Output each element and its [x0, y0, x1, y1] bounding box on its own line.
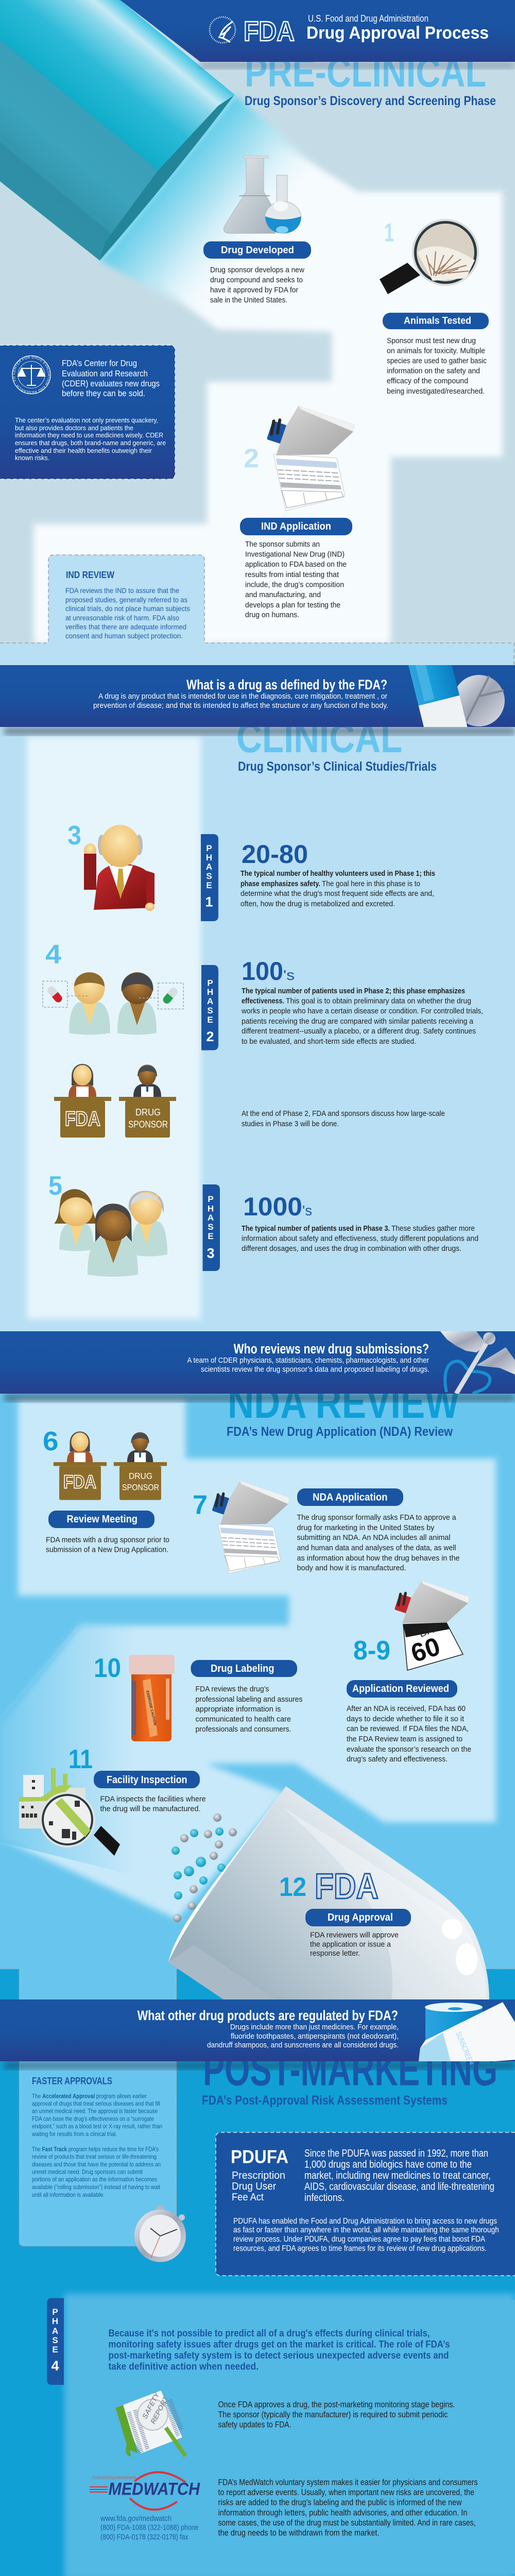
text: phase 1 description: often, how the drug is metabolized and excreted.	[241, 900, 395, 908]
text: drug labeling description: appropriate information is	[196, 1705, 281, 1714]
tab: phase 1: H	[206, 853, 212, 862]
stat: 1000's: 1000	[243, 1192, 302, 1221]
answer text: dandruff shampoos, and sunscreens are all considered drugs.	[207, 2041, 399, 2049]
text: drug developed description: sale in the United States.	[210, 296, 287, 304]
pill: Drug Developed	[203, 241, 311, 259]
step number 4: 4	[45, 940, 61, 970]
PDUFA body text	[233, 2217, 499, 2253]
text: NDA application description: The drug sponsor formally asks FDA to approve a	[297, 1513, 456, 1522]
text: NDA application description: and human data and analyses of the data, as well	[297, 1544, 456, 1552]
tab: phase 4: H	[52, 2316, 58, 2326]
text: drug approval description	[310, 1931, 399, 1958]
text: IND application description: drug on humans.	[245, 611, 299, 619]
title: Drug Approval Process	[306, 23, 489, 43]
tab: phase 1: A	[206, 862, 212, 872]
text: phase 4 intro: monitoring safety issues after drugs get on the market is critical. The role of FDA’s	[108, 2339, 450, 2350]
card body: unmet medical need. Drug sponsors can submit	[32, 2168, 143, 2176]
text: drug approval description: the application or issue a	[310, 1940, 391, 1948]
text: safety updates: The sponsor (typically the manufacturer) is required to submit periodic	[218, 2410, 448, 2419]
panel: faster approvals card	[19, 2056, 177, 2246]
text: MedWatch contact: (800) FDA-0178 (322-0178) fax	[100, 2533, 188, 2541]
icon: review meeting podiums: DRUG	[129, 1471, 152, 1481]
text: animals tested description	[387, 337, 487, 396]
tab: phase 4: 4	[51, 2358, 59, 2374]
icon: FDA and sponsor podiums: FDA	[65, 1108, 100, 1130]
text: safety updates: safety updates to FDA.	[218, 2420, 291, 2430]
panel: clinical section background	[0, 727, 515, 1332]
text: drug approval description: FDA reviewers will approve	[310, 1931, 399, 1939]
question title: Who reviews new drug submissions?	[234, 1341, 429, 1357]
text: phase 3 description: The typical number of patients used in Phase 3.	[242, 1224, 390, 1233]
text: phase 1 description: The typical number of healthy volunteers used in Phase 1; this	[241, 869, 435, 878]
card body: proposed studies, generally referred to as	[65, 596, 187, 604]
tab: phase 1: E	[206, 880, 212, 890]
pill: Application Reviewed: Application Reviewed	[352, 1683, 449, 1694]
tab: phase 2: A	[207, 996, 213, 1006]
band: other products	[0, 1999, 515, 2576]
pill: Animals Tested	[383, 313, 489, 329]
text: facility inspection description: the drug will be manufactured.	[100, 1805, 201, 1814]
text: drug developed description: have it approved by FDA for	[210, 286, 298, 294]
text: NDA application description	[297, 1513, 459, 1572]
text: MedWatch contact: (800) FDA-1088 (322-1088) phone	[100, 2523, 199, 2532]
pill: IND Application: IND Application	[261, 521, 331, 532]
heading: CLINICAL: CLINICAL	[236, 715, 402, 761]
pill: Drug Labeling: Drug Labeling	[211, 1663, 274, 1674]
step number 6: 6	[43, 1427, 59, 1456]
text: application reviewed description: the FDA Review team is assigned to	[347, 1735, 462, 1743]
card body: The Accelerated Approval program allows earlier	[32, 2092, 147, 2099]
tab: phase 3: P	[208, 1194, 214, 1204]
icon: review meeting podiums: SPONSOR	[122, 1483, 159, 1492]
icon: stopwatch	[134, 2206, 186, 2262]
icon: day 60 calendar: DAY	[418, 1622, 441, 1640]
stat: 20-80: 20-80	[242, 840, 308, 869]
icon: day 60 calendar: 60	[407, 1632, 443, 1668]
subheading: post-approval: FDA’s Post-Approval Risk Assessment Systems	[202, 2093, 448, 2108]
text: MedWatch contact: www.fda.gov/medwatch	[100, 2514, 171, 2523]
text: phase 1 description: determine what the drug's most frequent side effects are and,	[241, 889, 434, 898]
step number 7: 7	[193, 1490, 208, 1520]
text: MedWatch description: FDA’s MedWatch voluntary system makes it easier for physicians and consumers	[218, 2478, 478, 2487]
text: MedWatch description: some cases, the use of the drug must be substantially limited. And in rare cases,	[218, 2518, 476, 2528]
text: facility inspection description	[100, 1795, 206, 1814]
text: drug labeling description: FDA reviews the drug’s	[196, 1685, 269, 1693]
callout heading: (CDER) evaluates new drugs	[62, 379, 160, 388]
panel: CDER callout	[0, 345, 176, 480]
icon: drops falling from funnel	[171, 1814, 237, 1922]
decorative folded tube	[0, 0, 235, 261]
callout body: effective and their health benefits outweigh their	[15, 447, 152, 454]
question title: What other drug products are regulated by FDA?	[138, 2008, 398, 2023]
pill: Drug Approval	[305, 1909, 411, 1926]
step number 10: 10	[94, 1653, 121, 1683]
stat: 100's: 100	[242, 957, 283, 986]
band: what is a drug	[0, 665, 515, 736]
text: phase 4 intro	[108, 2328, 450, 2372]
panel: post-marketing section background	[0, 2061, 515, 2576]
text: phase 2 description	[241, 987, 483, 1046]
label: sunscreen: SUNSCREEN	[454, 2030, 475, 2066]
text: MedWatch description: the drug needs to be withdrawn from the market.	[218, 2529, 379, 2538]
pill: Review Meeting	[48, 1511, 154, 1528]
logo: MedWatch: Food and Drug Administration	[93, 2475, 136, 2480]
icon: prescription bottle	[129, 1655, 175, 1741]
text: MedWatch contact	[100, 2514, 199, 2541]
step number 1: 1	[384, 218, 394, 247]
callout body: ensures that drugs, both brand-name and generic, are	[15, 439, 166, 447]
card body: diseases and those that have the potential to address an	[32, 2161, 161, 2168]
card body: approval of drugs that treat serious diseases and that fill	[32, 2100, 160, 2107]
text: IND application description: and manufacturing, and	[245, 591, 321, 599]
text: NDA application description: as information about how the drug behaves in the	[297, 1554, 459, 1563]
pill: Animals Tested: Animals Tested	[404, 316, 471, 327]
tab: phase 3: A	[208, 1213, 214, 1223]
card body: waiting for results from a clinical trial.	[31, 2130, 117, 2138]
text: phase 1 description: phase emphasizes safety.	[241, 879, 320, 888]
text: IND application description: develops a plan for testing the	[245, 601, 340, 609]
heading: NDA REVIEW: NDA REVIEW	[228, 1378, 460, 1428]
text: application reviewed description: evaluate the sponsor’s research on the	[347, 1745, 471, 1754]
text: application reviewed description: can be reviewed. If FDA files the NDA,	[347, 1724, 469, 1733]
callout body: but also provides doctors and patients the	[15, 425, 133, 432]
card body: an unmet medical need. The approval is faster because	[32, 2108, 158, 2115]
card body: review of products that treat serious or life-threatening	[32, 2153, 157, 2160]
tab: phase 3: E	[208, 1231, 214, 1241]
text: drug developed description: Drug sponsor develops a new	[210, 266, 304, 275]
icon: white funnel	[168, 1786, 489, 1999]
text: phase 3 description: information about safety and effectiveness, study different populations and	[242, 1234, 478, 1243]
text: application reviewed description	[347, 1704, 471, 1764]
PDUFA history text: 1,000 drugs and biologics have come to the	[304, 2159, 472, 2170]
text: NDA application description: submitting an NDA. An NDA includes all animal	[297, 1533, 450, 1542]
icon: FDA and sponsor podiums: SPONSOR	[128, 1119, 168, 1129]
text: phase 4 intro: Because it's not possible to predict all of a drug's effects during clinical trials,	[108, 2328, 430, 2339]
text: phase 4 intro: post-marketing safety system is to detect serious unexpected adverse events and	[108, 2350, 449, 2361]
text: phase 1 description: The goal here in this phase is to	[322, 879, 420, 888]
answer text: Drugs include more than just medicines. For example,	[230, 2023, 399, 2031]
section background: post-marketing top blocks	[0, 1969, 515, 2000]
tab: phase 2	[201, 965, 218, 1050]
step number 12: 12	[279, 1872, 306, 1902]
text: review meeting description	[46, 1535, 169, 1554]
tab: phase 1: S	[206, 871, 212, 881]
icon: magnifier over fur	[380, 219, 479, 294]
answer text	[93, 692, 388, 710]
text: application reviewed description: After an NDA is received, FDA has 60	[347, 1704, 466, 1713]
pill: Review Meeting: Review Meeting	[67, 1514, 138, 1525]
icon: safety report	[115, 2391, 185, 2456]
text: safety updates: Once FDA approves a drug, the post-marketing monitoring stage begins.	[218, 2400, 455, 2409]
pill: Facility Inspection	[94, 1771, 200, 1788]
callout heading	[62, 359, 160, 398]
text: IND application description: include, the drug’s composition	[245, 581, 344, 589]
subheading: NDA review: FDA’s New Drug Application (NDA) Review	[227, 1425, 453, 1439]
answer text: fluoride toothpastes, antiperspirants (not deodorant),	[231, 2032, 399, 2041]
PDUFA history text	[304, 2148, 494, 2204]
step numbers 8-9: 8-9	[353, 1636, 390, 1666]
card body: clinical trials, do not place human subjects	[65, 604, 190, 613]
text: drug developed description: drug compound and seeks to	[210, 276, 303, 284]
callout body: known risks.	[15, 454, 49, 462]
icon: flasks	[224, 156, 301, 233]
text: end of phase 2: studies in Phase 3 will be done.	[242, 1120, 339, 1128]
icon: caduceus	[440, 1331, 515, 1394]
text: animals tested description: information on the safety and	[387, 367, 480, 376]
logo: MedWatch	[90, 2472, 200, 2510]
text: IND application description: Investigational New Drug (IND)	[245, 550, 345, 558]
text: phase 4 intro: take definitive action when needed.	[108, 2362, 259, 2372]
callout heading: before they can be sold.	[62, 388, 145, 398]
text: IND application description: application to FDA based on the	[245, 561, 347, 569]
card body: available (“rolling submission”) instead of having to wait	[32, 2183, 161, 2191]
card title: FASTER APPROVALS	[32, 2076, 112, 2087]
text: facility inspection description: FDA inspects the facilities where	[100, 1795, 206, 1803]
icon: sunscreen bottle and tube	[419, 2002, 515, 2061]
card body: FDA reviews the IND to assure that the	[65, 586, 179, 595]
card body: endpoint,” such as a blood test or X-ray result, rather than	[32, 2123, 162, 2130]
callout body: information they need to use medicines wisely. CDER	[15, 432, 163, 439]
text: phase 2 description: effectiveness.	[242, 996, 284, 1005]
step number 11: 11	[68, 1744, 93, 1774]
subheading: clinical studies: Drug Sponsor’s Clinical Studies/Trials	[238, 759, 437, 774]
icon: review meeting podiums	[54, 1431, 167, 1500]
icon: factory under magnifier	[19, 1768, 120, 1856]
text: drug approval description: response letter.	[310, 1949, 360, 1958]
question title: What is a drug as defined by the FDA?	[186, 677, 387, 692]
icon: CDER seal	[12, 355, 51, 395]
tab: phase 2: P	[207, 978, 213, 988]
tab: phase 2: S	[207, 1006, 213, 1015]
text: phase 3 description: different dosages, and uses the drug in combination with other drugs.	[242, 1244, 461, 1253]
tab: phase 3: S	[208, 1222, 214, 1232]
text: phase 2 description: to be evaluated, and short-term side effects are studied.	[242, 1037, 416, 1046]
tab: phase 3: H	[208, 1204, 214, 1213]
answer text	[187, 1356, 430, 1374]
stat: 1000's: 's	[302, 1202, 312, 1218]
tab: phase 4: S	[52, 2335, 58, 2345]
text: animals tested description: efficacy of the compound	[387, 377, 468, 385]
tab: phase 2: 2	[206, 1029, 214, 1044]
card body	[31, 2092, 162, 2198]
answer text: scientists review the drug sponsor’s data and proposed labeling of drugs.	[201, 1365, 430, 1374]
answer text: A drug is any product that is intended for use in the diagnosis, cure mitigation, treatment , or	[98, 692, 387, 701]
tab: phase 2: H	[207, 987, 213, 997]
text: IND application description: results from intial testing that	[245, 571, 339, 579]
card body: until all information is available.	[32, 2191, 105, 2198]
card body: FDA can base the drug’s effectiveness on a “surrogate	[32, 2115, 154, 2123]
icon: IND form with cover	[267, 405, 355, 511]
FDA logo on funnel: FDA	[315, 1866, 379, 1906]
header band	[120, 0, 515, 69]
panel: PDUFA	[216, 2132, 515, 2276]
text: drug labeling description: communicated to health care	[196, 1715, 291, 1724]
pill: Drug Labeling	[191, 1660, 297, 1677]
icon: prescription bottle: EXERCISE CAUTION	[145, 1690, 157, 1726]
text: phase 1 description	[241, 869, 435, 908]
text: animals tested description: being investigated/researched.	[387, 387, 485, 396]
text: MedWatch description: to report adverse events. Usually, when important new risks are uncovered, the	[218, 2488, 474, 2497]
icon: three patients	[54, 1189, 167, 1277]
tab: phase 4: A	[52, 2326, 58, 2336]
PDUFA full name	[232, 2170, 285, 2203]
step number 5: 5	[48, 1171, 62, 1201]
text: end of phase 2: At the end of Phase 2, FDA and sponsors discuss how large-scale	[242, 1109, 445, 1118]
text: NDA application description: drug for marketing in the United States by	[297, 1523, 435, 1532]
PDUFA acronym: PDUFA	[231, 2146, 288, 2167]
card body: at unreasonable risk of harm. FDA also	[65, 614, 179, 622]
card title: IND REVIEW	[66, 570, 114, 580]
answer text: A team of CDER physicians, statisticians, chemists, pharmacologists, and other	[187, 1356, 429, 1365]
PDUFA history text: infections.	[304, 2192, 345, 2204]
pill: Drug Approval: Drug Approval	[328, 1912, 393, 1923]
tab: phase 4: P	[52, 2307, 58, 2317]
PDUFA full name: Prescription	[232, 2170, 285, 2181]
logo: MedWatch: MEDWATCH	[108, 2479, 200, 2499]
text: IND application description	[245, 540, 347, 619]
text: review meeting description: FDA meets with a drug sponsor prior to	[46, 1535, 169, 1544]
text: drug developed description	[210, 266, 304, 304]
pill: NDA Application	[297, 1488, 403, 1506]
band: who reviews	[0, 1331, 515, 1402]
stat: 100's: 's	[283, 967, 295, 983]
callout body: The center’s evaluation not only prevents quackery,	[15, 417, 158, 424]
panel: pre-clinical section background	[0, 0, 515, 670]
tab: phase 1: 1	[205, 894, 213, 910]
text: drug labeling description	[196, 1685, 303, 1734]
text: phase 2 description: patients receiving the drug are compared with similar patients receiving a	[242, 1017, 474, 1026]
pill: IND Application	[240, 518, 352, 535]
card body	[65, 586, 190, 640]
text: IND application description: The sponsor submits an	[245, 540, 320, 549]
text: MedWatch description	[218, 2478, 478, 2538]
icon: volunteer in red suit	[84, 825, 154, 911]
card body: portions of an application as the information becomes	[32, 2176, 157, 2183]
text: phase 2 description: This goal is to obtain preliminary data on whether the drug	[286, 996, 471, 1005]
pill: Facility Inspection: Facility Inspection	[107, 1774, 187, 1786]
agency name: U.S. Food and Drug Administration	[308, 13, 428, 24]
PDUFA full name: Fee Act	[232, 2192, 264, 2203]
callout heading: Evaluation and Research	[62, 369, 148, 378]
panel: IND review card and strip	[0, 555, 515, 665]
text: MedWatch description: information through letters, public health advisories, and other education. In	[218, 2508, 468, 2517]
panel: NDA review section background	[0, 1391, 515, 2002]
tab: phase 1	[201, 834, 218, 921]
icon: capsule and tablet	[408, 665, 505, 727]
tab: phase 2: E	[207, 1015, 213, 1025]
icon: HHS seal	[210, 17, 235, 43]
text: phase 2 description: different treatment--usually a placebo, or a different drug. Safety continues	[242, 1027, 476, 1036]
pill: Application Reviewed	[347, 1680, 457, 1698]
answer text	[207, 2023, 399, 2049]
text: drug labeling description: professional labeling and assures	[196, 1695, 303, 1704]
card body: The Fast Track program helps reduce the time for FDA’s	[32, 2145, 159, 2153]
tab: phase 4	[47, 2298, 64, 2385]
FDA logo: FDA	[244, 16, 295, 47]
icon: FDA and sponsor podiums	[54, 1064, 176, 1138]
step number 2: 2	[244, 444, 259, 473]
icon: FDA and sponsor podiums: DRUG	[135, 1107, 161, 1117]
tab: phase 3	[203, 1184, 220, 1271]
tab: phase 1: P	[206, 843, 212, 853]
text: phase 3 description: These studies gather more	[391, 1224, 475, 1233]
pill: NDA Application: NDA Application	[313, 1492, 387, 1503]
text: drug labeling description: professionals and consumers.	[196, 1725, 291, 1734]
text: phase 3 description	[242, 1224, 478, 1253]
text: animals tested description: on animals for toxicity. Multiple	[387, 347, 485, 355]
icon: review meeting podiums: FDA	[63, 1471, 96, 1492]
icon: NDA form with cover	[212, 1481, 289, 1573]
answer text: prevention of disease; and that tis intended to affect the structure or any function of the body.	[93, 701, 388, 710]
callout body	[15, 417, 166, 462]
callout heading: FDA’s Center for Drug	[62, 359, 137, 368]
card body: consent and human subject protection.	[65, 632, 183, 640]
text: animals tested description: Sponsor must test new drug	[387, 337, 476, 345]
tab: phase 4: E	[52, 2345, 58, 2354]
text: application reviewed description: days to decide whether to file it so it	[347, 1715, 465, 1723]
text: animals tested description: species are used to gather basic	[387, 357, 487, 365]
pill: Drug Developed: Drug Developed	[221, 245, 294, 256]
PDUFA full name: Drug User	[232, 2181, 276, 2192]
icon: two patients with pills	[43, 972, 183, 1035]
text: MedWatch description: risks are added to the drug's labeling and the public is informed of the new	[218, 2498, 462, 2507]
icon: CDER seal: CENTER FOR DRUG EVALUATION AND RESEARCH · FDA ·	[12, 356, 50, 394]
text: phase 2 description: works in people who have a certain disease or condition. For controlled trials,	[241, 1007, 483, 1015]
tab: phase 3: 3	[207, 1246, 215, 1261]
text: review meeting description: submission of a New Drug Application.	[46, 1546, 168, 1554]
text: end of phase 2	[242, 1109, 445, 1128]
icon: safety report: REPORT	[149, 2394, 170, 2425]
text: safety updates	[218, 2400, 455, 2430]
icon: day 60 calendar	[394, 1581, 469, 1670]
text: phase 2 description: The typical number of patients used in Phase 2; this phase emphasizes	[242, 987, 465, 995]
text: NDA application description: body and how it is manufactured.	[297, 1564, 406, 1572]
step number 3: 3	[67, 821, 81, 851]
text: application reviewed description: drug’s safety and effectiveness.	[347, 1755, 448, 1764]
icon: safety report: SAFETY	[141, 2391, 161, 2420]
card body: verifies that there are adequate informed	[65, 622, 186, 631]
